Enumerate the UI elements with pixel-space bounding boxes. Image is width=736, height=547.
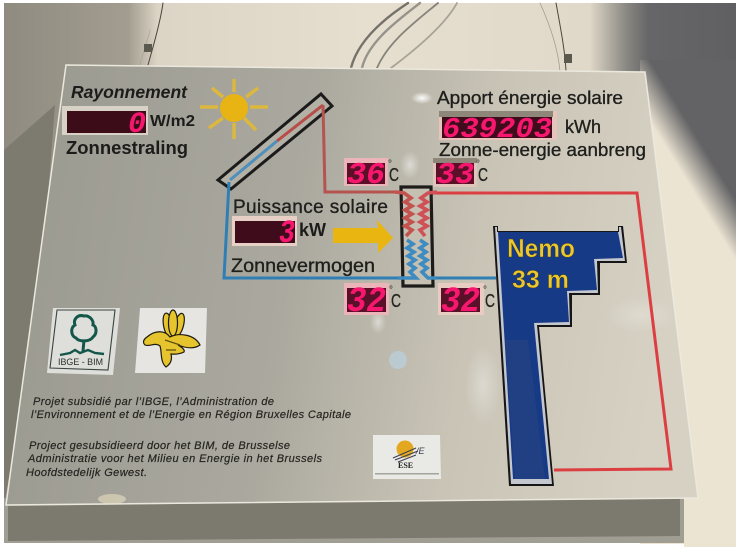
display: temperature 33 °C: C — [478, 165, 488, 185]
heading: Zonnestraling: Zonnestraling — [66, 137, 188, 158]
display: radiation W/m2 — [62, 106, 148, 142]
heat exchanger — [395, 187, 437, 286]
display: temperature 33 °C: ° — [476, 159, 480, 170]
hot circuit: red pipe — [323, 105, 671, 470]
hanging wires and cables — [140, 3, 572, 71]
text block: French subsidy notice: l’Environnement et de l’Energie en Région Bruxelles Capitale — [31, 409, 351, 421]
arrow: solar power flow — [333, 220, 393, 253]
label: pool name: Nemo — [507, 233, 575, 263]
display: solar power kW: 3 — [279, 215, 295, 252]
text block: French subsidy notice: Projet subsidié par l’IBGE, l’Administration de — [33, 396, 274, 408]
text block: Dutch subsidy notice: Administratie voor het Milieu en Energie in het Brussels — [27, 453, 322, 465]
text block: Dutch subsidy notice: Hoofdstedelijk Gewest. — [26, 467, 147, 479]
heading: Zonne-energie aanbreng: Zonne-energie aanbreng — [439, 139, 646, 160]
logo: ESE: ESE — [398, 461, 413, 470]
pool: Nemo 33 m — [493, 226, 627, 486]
display: temperature 36 °C — [344, 158, 399, 193]
label: pool length: 33 m — [512, 266, 569, 294]
text block: Dutch subsidy notice: Project gesubsidieerd door het BIM, de Brusselse — [29, 440, 290, 452]
display: temperature 32 °C left: ° — [389, 285, 393, 296]
logo: ESE — [373, 435, 441, 479]
display: temperature 33 °C — [433, 158, 488, 193]
display: temperature 32 °C left: C — [391, 291, 401, 311]
unit: kW: kW — [299, 220, 326, 240]
cold circuit: blue pipe — [224, 182, 496, 278]
display: temperature 32 °C right: C — [485, 291, 495, 311]
text block: Dutch subsidy notice — [26, 440, 322, 479]
heading: Apport énergie solaire: Apport énergie solaire — [437, 87, 623, 108]
display: temperature 36 °C: C — [389, 165, 399, 185]
logo: Brussels iris — [135, 308, 207, 373]
display: temperature 36 °C: 36 — [347, 158, 385, 193]
logo: ESE: /E — [415, 446, 426, 456]
display: radiation W/m2: 0 — [128, 108, 146, 142]
text block: French subsidy notice — [31, 396, 351, 421]
heading: Zonnevermogen: Zonnevermogen — [231, 255, 375, 277]
logo: IBGE-BIM: IBGE - BIM — [58, 357, 103, 367]
logo: IBGE-BIM — [47, 308, 120, 375]
display: solar power kW — [232, 215, 297, 252]
display: temperature 32 °C right: ° — [483, 285, 487, 296]
unit: W/m2: W/m2 — [150, 113, 195, 130]
panel: solar board — [6, 65, 698, 505]
heading: Puissance solaire: Puissance solaire — [233, 197, 388, 218]
display: solar energy kWh: 639203 — [442, 113, 552, 146]
display: temperature 33 °C: 33 — [436, 158, 474, 193]
unit: kWh: kWh — [565, 117, 601, 137]
heading: Rayonnement: Rayonnement — [71, 82, 188, 102]
icon: sun — [200, 79, 268, 139]
display: temperature 36 °C: ° — [388, 159, 392, 170]
display: temperature 32 °C right: 32 — [441, 282, 480, 322]
solar collector — [218, 94, 332, 189]
display: temperature 32 °C left: 32 — [347, 282, 386, 322]
